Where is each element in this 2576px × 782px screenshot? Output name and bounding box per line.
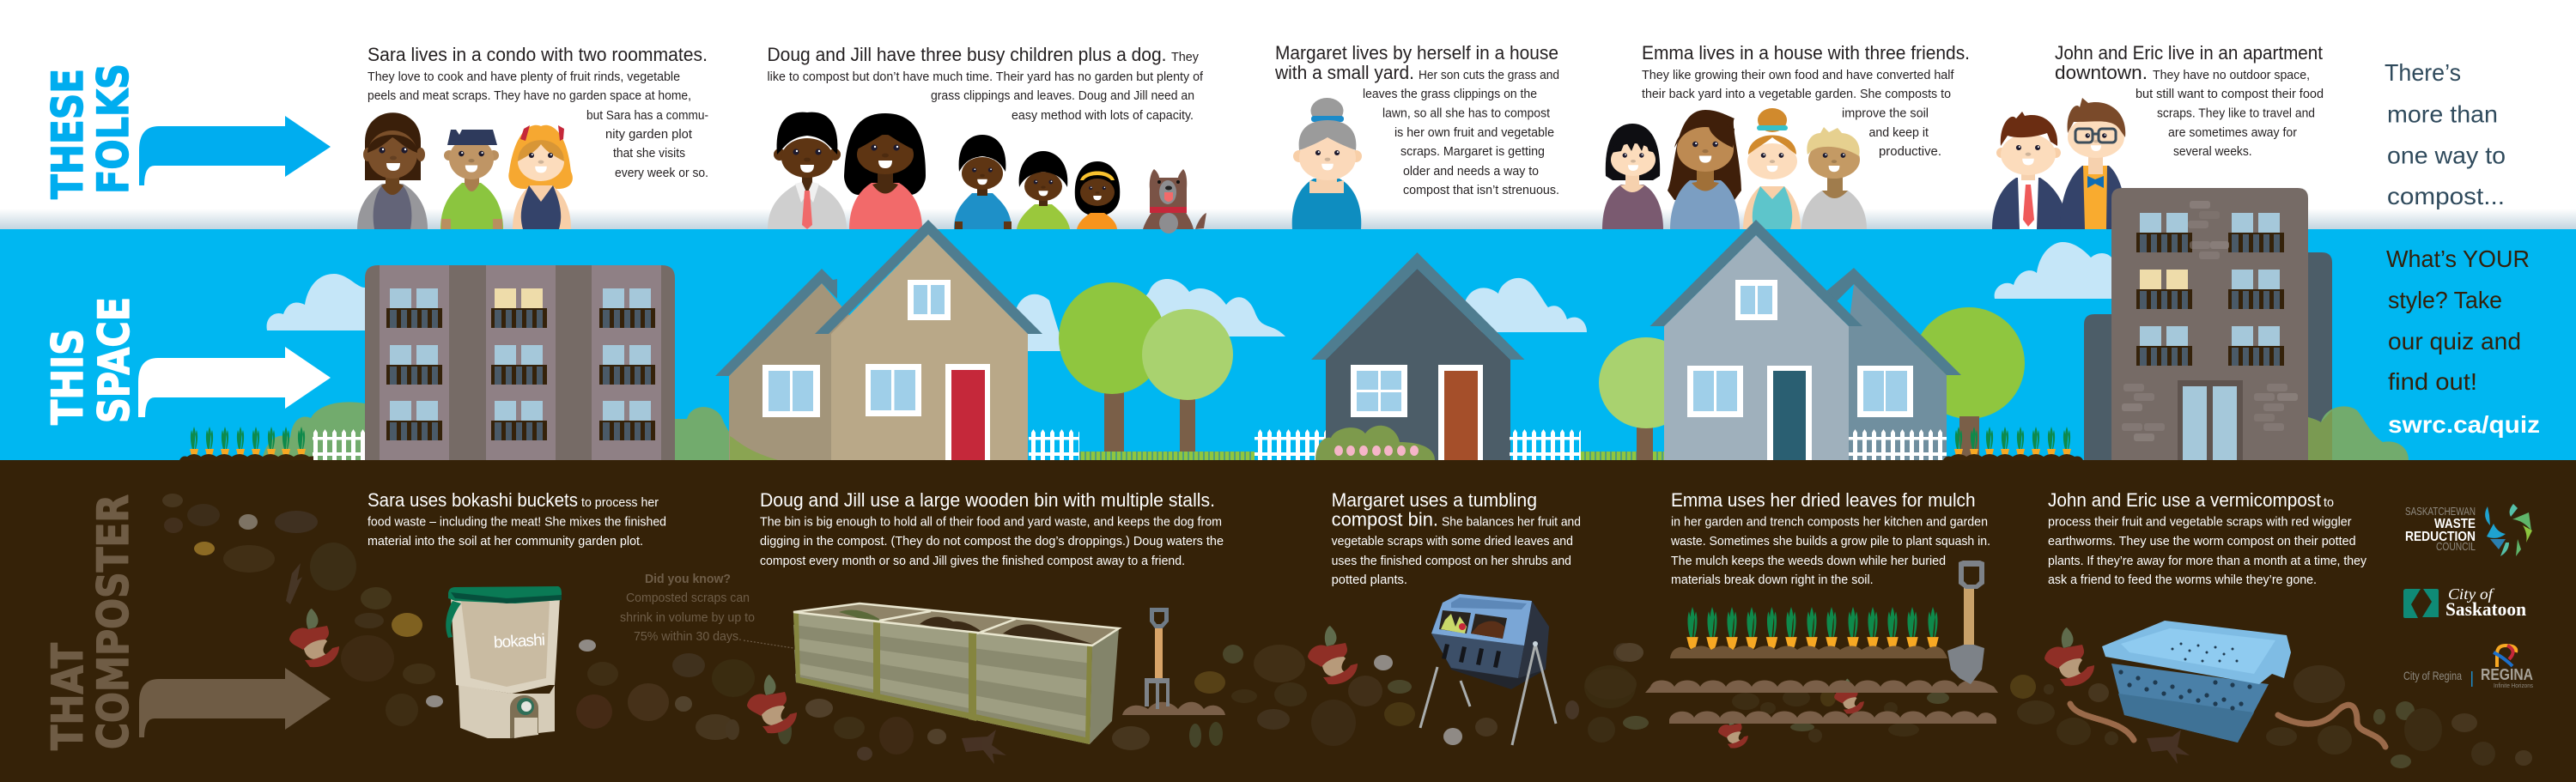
text: Emma composter: materials break down right in the soil. xyxy=(1671,573,1874,587)
fence xyxy=(313,429,365,460)
logo: City of Regina: Infinite Horizons xyxy=(2494,683,2533,689)
icon: Regina R xyxy=(2494,646,2516,667)
building: apartment xyxy=(2111,188,2308,460)
icon: earthworm xyxy=(2278,705,2385,747)
background: white top band xyxy=(0,0,2576,229)
callout: did you know: Did you know? xyxy=(645,572,731,586)
text: Doug and Jill intro xyxy=(768,44,1204,123)
text: Emma intro: and keep it xyxy=(1868,125,1929,140)
cloud behind apartment xyxy=(1995,242,2111,299)
logo: City of Regina: REGINA xyxy=(2481,666,2533,683)
window xyxy=(762,365,820,417)
person: roommate with orange hair xyxy=(508,125,573,229)
text: Doug and Jill intro: They xyxy=(1171,50,1199,64)
text: John and Eric composter: plants. If they’re away for more than a month at a time, they xyxy=(2048,554,2366,568)
bush beside house 1 xyxy=(675,407,778,460)
top band fade xyxy=(0,209,2576,229)
text: quiz call to action: What’s YOUR xyxy=(2386,246,2530,272)
person: Margaret xyxy=(1292,98,1362,229)
text: Sara composter: Sara uses bokashi buckets xyxy=(368,489,578,511)
fence xyxy=(1029,429,1079,460)
people: Emma and friends xyxy=(1602,108,1867,229)
text: Sara intro: every week or so. xyxy=(615,166,708,180)
heading: THAT COMPOSTER: THAT xyxy=(43,643,93,750)
door: rust xyxy=(1438,365,1483,460)
brown soil band xyxy=(0,460,2576,782)
text: Sara intro: but Sara has a commu- xyxy=(586,108,708,123)
person: friend with blond hair xyxy=(1801,127,1867,229)
text: Doug and Jill intro: grass clippings and leaves. Doug and Jill need an xyxy=(931,88,1194,103)
cloud xyxy=(267,274,365,330)
text: Emma composter: Emma uses her dried leaves for mulch xyxy=(1671,489,1975,511)
text: Margaret composter: She balances her fruit and xyxy=(1442,515,1581,530)
logo: Saskatchewan Waste Reduction Council: REDUCTION xyxy=(2405,530,2476,544)
icon: garden fork xyxy=(1122,608,1225,715)
window xyxy=(1351,365,1407,417)
text: Emma composter: in her garden and trench composts her kitchen and garden xyxy=(1671,515,1988,530)
person: friend with orange bun xyxy=(1743,108,1801,229)
text: Emma intro: their back yard into a vegetable garden. She composts to xyxy=(1642,87,1951,101)
icon: bokashi bucket: bokashi xyxy=(493,631,545,652)
text: Emma intro: productive. xyxy=(1879,144,1941,159)
icon: earthworm xyxy=(2070,704,2134,740)
text: John and Eric intro xyxy=(2055,42,2324,159)
text: quiz call to action: find out! xyxy=(2388,368,2477,395)
back building xyxy=(2084,252,2332,460)
text: Doug and Jill intro: like to compost but don’t have much time. Their yard has no garden but plenty of xyxy=(768,70,1204,84)
heading: THIS SPACE xyxy=(43,297,139,425)
text: Sara intro: They love to cook and have plenty of fruit rinds, vegetable xyxy=(368,70,680,84)
carrots: apartment garden xyxy=(1943,427,2083,460)
text: Sara composter: material into the soil at her community garden plot. xyxy=(368,534,643,549)
blue sky band xyxy=(0,229,2576,461)
heading: THIS SPACE: SPACE xyxy=(89,297,139,423)
text: Doug and Jill composter: Doug and Jill use a large wooden bin with multiple stalls. xyxy=(760,489,1215,511)
text: Emma intro: Emma lives in a house with three friends. xyxy=(1642,42,1970,64)
text: Emma intro: They like growing their own food and have converted half xyxy=(1642,68,1954,82)
icon: apple core xyxy=(1718,713,1748,749)
text: Emma intro xyxy=(1642,42,1970,159)
logo: Saskatchewan Waste Reduction Council: SASKATCHEWAN xyxy=(2405,505,2476,518)
text: quiz call to action: swrc.ca/quiz xyxy=(2388,411,2540,438)
text: Margaret intro: is her own fruit and vegetable xyxy=(1394,125,1554,140)
text: quiz call to action: our quiz and xyxy=(2388,328,2521,355)
icon: apple core xyxy=(747,675,797,733)
grass strip xyxy=(1079,452,1255,460)
text: there's more than one way to compost: one way to xyxy=(2387,142,2506,169)
text: John and Eric intro: They have no outdoor space, xyxy=(2153,68,2310,82)
text: Sara composter xyxy=(368,489,666,549)
logo: Saskatchewan Waste Reduction Council: COUNCIL xyxy=(2436,540,2476,553)
text: John and Eric composter: earthworms. They use the worm compost on their potted xyxy=(2048,534,2356,549)
icon: garden rows with carrots and shovel xyxy=(1645,561,1998,724)
fence xyxy=(1510,429,1581,460)
text: Margaret composter: vegetable scraps with some dried leaves and xyxy=(1332,534,1573,549)
logo: City of Regina xyxy=(2403,646,2533,689)
text: Doug and Jill composter: The bin is big enough to hold all of their food and yard waste, and keeps the dog from xyxy=(760,515,1222,530)
callout: did you know xyxy=(620,572,793,648)
text: Doug and Jill composter xyxy=(760,489,1224,568)
apartment door xyxy=(2178,380,2243,460)
text: John and Eric intro: downtown. xyxy=(2055,62,2148,83)
text: John and Eric composter: John and Eric use a vermicompost xyxy=(2048,489,2321,511)
text: Margaret composter: uses the finished compost on her shrubs and xyxy=(1332,554,1571,568)
text: John and Eric composter: to xyxy=(2324,495,2334,510)
text: Emma intro: improve the soil xyxy=(1842,106,1929,120)
text: Margaret composter: compost bin. xyxy=(1332,509,1438,530)
text: Margaret intro: older and needs a way to xyxy=(1403,164,1539,179)
bricks xyxy=(2122,201,2298,441)
icon: apple core xyxy=(1834,679,1864,714)
text: John and Eric intro: are sometimes away for xyxy=(2168,125,2297,140)
fence xyxy=(1255,429,1326,460)
person: friend with black hair xyxy=(1602,124,1663,229)
person: child in green shirt xyxy=(1017,151,1070,229)
bush behind condo xyxy=(262,402,365,460)
text: John and Eric intro: but still want to compost their food xyxy=(2136,87,2324,101)
window xyxy=(1857,366,1913,417)
person: roommate with navy hair xyxy=(440,130,503,229)
text: Doug and Jill intro: Doug and Jill have three busy children plus a dog. xyxy=(768,44,1166,65)
text: Emma composter: The mulch keeps the weeds down while her buried xyxy=(1671,554,1946,568)
building: condo xyxy=(365,265,675,460)
icon: apple core xyxy=(1308,626,1358,684)
text: Doug and Jill composter: compost every month or so and Jill gives the finished compost away to a friend. xyxy=(760,554,1185,568)
people: John and Eric xyxy=(1992,98,2127,229)
icon: dog xyxy=(1143,169,1206,233)
text: Margaret composter: potted plants. xyxy=(1332,573,1407,587)
people: Sara and roommates xyxy=(357,112,573,229)
text: Margaret intro xyxy=(1274,42,1559,197)
soil debris xyxy=(162,494,2532,768)
text: there's more than one way to compost xyxy=(2385,59,2506,209)
heading: THESE FOLKS xyxy=(43,64,138,199)
icon: bokashi bucket xyxy=(446,586,562,738)
text: there's more than one way to compost: compost... xyxy=(2387,183,2505,209)
text: John and Eric intro: John and Eric live in an apartment xyxy=(2055,42,2323,64)
text: John and Eric composter: ask a friend to feed the worms while they’re gone. xyxy=(2048,573,2317,587)
icon: tumbling compost bin xyxy=(1420,594,1556,745)
door: teal xyxy=(1767,366,1812,460)
text: Emma composter xyxy=(1670,489,1990,587)
heading: THAT COMPOSTER: COMPOSTER xyxy=(88,494,138,749)
window xyxy=(1687,366,1743,417)
person: child in blue shirt xyxy=(954,135,1012,229)
text: Sara intro: that she visits xyxy=(613,146,685,161)
text: Sara intro: Sara lives in a condo with two roommates. xyxy=(368,44,708,65)
text: Sara intro xyxy=(368,44,708,180)
heading: THIS SPACE: THIS xyxy=(43,329,93,425)
text: John and Eric intro: several weeks. xyxy=(2173,144,2252,159)
text: Margaret intro: leaves the grass clippings on the xyxy=(1363,87,1537,101)
person: Doug xyxy=(768,112,847,229)
logo: Saskatchewan Waste Reduction Council: WASTE xyxy=(2434,517,2476,531)
text: Sara composter: to process her xyxy=(581,495,659,510)
text: quiz call to action: style? Take xyxy=(2388,287,2502,313)
fence xyxy=(1849,429,1947,460)
text: Emma composter: waste. Sometimes she builds a grow pile to plant squash in. xyxy=(1670,534,1990,549)
text: Margaret intro: Margaret lives by herself in a house xyxy=(1275,42,1558,64)
person: child in orange shirt xyxy=(1075,161,1120,229)
cloud behind house 2 xyxy=(1465,278,1587,332)
window xyxy=(866,364,921,416)
bush with flowers xyxy=(1315,426,1435,460)
callout: did you know: shrink in volume by up to xyxy=(620,610,755,625)
text: Margaret intro: lawn, so all she has to compost xyxy=(1382,106,1551,120)
icon: apple core xyxy=(2044,627,2094,686)
logo: City of Saskatoon: Saskatoon xyxy=(2445,598,2526,620)
text: Doug and Jill intro: easy method with lots of capacity. xyxy=(1012,108,1194,123)
house: Margaret xyxy=(1311,252,1525,460)
text: John and Eric intro: scraps. They like to travel and xyxy=(2157,106,2315,120)
soil stones and nuggets xyxy=(194,514,1462,745)
person: Eric xyxy=(2060,98,2127,229)
icon: vermicompost bin xyxy=(2102,621,2291,743)
icon: pinwheel xyxy=(2485,504,2532,556)
text: John and Eric composter: process their fruit and vegetable scraps with red wiggler xyxy=(2048,515,2351,530)
heading: THESE FOLKS: THESE xyxy=(43,69,93,199)
grass strip xyxy=(1581,452,1664,460)
text: Margaret intro: with a small yard. xyxy=(1274,62,1414,83)
arrow: that composter xyxy=(139,668,331,737)
icon: wooden compost bin xyxy=(793,603,1119,744)
text: John and Eric composter xyxy=(2048,489,2366,587)
window xyxy=(908,280,951,320)
logo: Saskatchewan Waste Reduction Council xyxy=(2405,504,2532,556)
house: Emma xyxy=(1650,220,1961,460)
text: Sara intro: nity garden plot xyxy=(605,127,693,142)
arrow: this space xyxy=(138,347,331,417)
heading: THESE FOLKS: FOLKS xyxy=(88,64,138,194)
text: Margaret composter xyxy=(1332,489,1581,587)
text: Sara composter: food waste – including the meat! She mixes the finished xyxy=(368,515,666,530)
heading: THAT COMPOSTER xyxy=(43,494,138,750)
text: Doug and Jill composter: digging in the compost. (They do not compost the dog’s droppings.) Doug waters the xyxy=(760,534,1224,549)
logo: City of Saskatoon xyxy=(2403,585,2526,620)
carrots: condo garden xyxy=(179,427,318,460)
text: Margaret intro: compost that isn’t strenuous. xyxy=(1403,183,1559,197)
text: there's more than one way to compost: more than xyxy=(2387,101,2498,128)
tree: light green xyxy=(1599,337,1693,460)
text: Margaret composter: Margaret uses a tumbling xyxy=(1332,489,1537,511)
person: Jill xyxy=(844,113,926,229)
text: quiz call to action xyxy=(2386,246,2540,438)
person: John xyxy=(1992,112,2068,229)
person: Emma xyxy=(1668,110,1741,229)
text: Margaret intro: Her son cuts the grass and xyxy=(1419,68,1559,82)
text: there's more than one way to compost: There’s xyxy=(2385,59,2461,86)
arrow: these folks xyxy=(139,116,331,185)
text: Sara intro: peels and meat scraps. They have no garden space at home, xyxy=(368,88,691,103)
tree: green xyxy=(1913,307,2025,460)
window xyxy=(1735,280,1777,320)
clouds behind trees xyxy=(1015,279,1285,351)
house: Doug and Jill xyxy=(715,220,1042,460)
people: Doug, Jill, children and dog xyxy=(768,112,1206,233)
text: Margaret intro: scraps. Margaret is getting xyxy=(1400,144,1545,159)
person: Sara xyxy=(357,112,428,229)
bush beside apartment xyxy=(2308,406,2409,460)
door: red xyxy=(945,364,990,460)
logo: City of Saskatoon: City of xyxy=(2448,585,2495,603)
callout: did you know: 75% within 30 days. xyxy=(634,629,742,644)
icon: apple core xyxy=(289,609,339,667)
tree: large green xyxy=(1059,282,1165,452)
logo: City of Regina: City of Regina xyxy=(2403,669,2462,682)
callout: did you know: Composted scraps can xyxy=(626,591,750,605)
tree: light green xyxy=(1142,309,1233,452)
